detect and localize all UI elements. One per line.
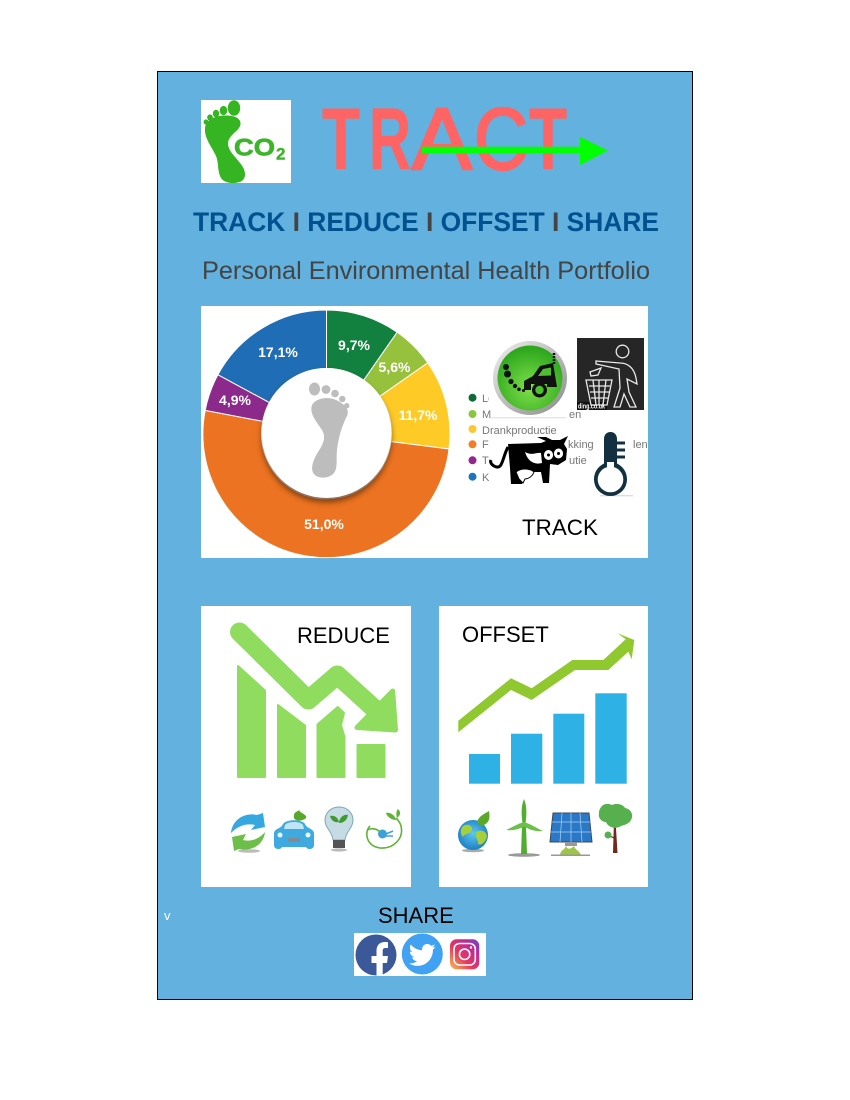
icon: littering sign: ding.co.uk [578,404,605,410]
donut labels: 51,0% [304,516,344,532]
legend: F [482,439,489,451]
icon: car exhaust badge [493,341,567,415]
legend: utie [569,455,587,467]
icon: wind turbine [506,799,543,857]
donut labels: 4,9% [219,392,252,408]
stray letter v: v [164,908,171,923]
legend: K [482,472,490,484]
icon: green plug [367,809,402,848]
icon: green car [274,810,314,849]
label: reduce: REDUCE [297,623,390,648]
legend [468,392,648,496]
donut labels: 11,7% [399,407,438,423]
legend: len [633,439,648,451]
donut chart [203,310,450,558]
legend: M [482,409,491,421]
panel: reduce [201,606,411,887]
chart: rising arrow [458,633,634,732]
icon: twitter [402,934,443,974]
icon: globe [458,811,489,852]
donut labels: 17,1% [258,344,298,360]
title: TRACT: T [529,91,567,188]
arrow: green title arrow [422,137,608,165]
legend: Lo [482,393,494,405]
icon: recycle arrows [231,813,265,853]
legend: en [569,409,581,421]
label: share: SHARE [378,903,454,928]
panel: track [201,306,648,558]
icon: CO2 footprint logo: 2 [276,144,285,164]
icon: thermometer [594,432,627,496]
panel: offset [439,606,648,887]
donut labels [219,337,438,532]
donut labels: 5,6% [379,359,411,375]
donut labels: 9,7% [338,337,371,353]
title: TRACT: T [322,91,360,188]
icon: solar panel [550,813,592,856]
legend: kking [568,439,594,451]
legend: T [482,455,489,467]
poster background panel [158,72,692,1000]
icon: instagram [450,939,479,969]
icon: CO2 footprint logo [201,100,291,183]
icon: tree [599,804,632,853]
donut centre with footprint [262,368,392,502]
legend: Drankproductie [482,425,557,437]
label: track: TRACK [522,515,598,540]
icon: CO2 footprint logo: CO [234,134,275,162]
label: offset: OFFSET [462,622,549,647]
icon: cow [491,436,568,484]
chart: falling bars and arrow [238,632,396,777]
title: TRACT: R [369,91,411,188]
icon: littering sign [577,338,644,410]
title: TRACT: A [412,91,472,188]
title: TRACT: C [474,91,528,188]
heading: track reduce offset share: TRACK I REDUCE I OFFSET I SHARE [193,207,659,237]
icon: facebook [356,934,396,976]
icon: eco light bulb [325,807,353,852]
chart: rising bars [469,693,627,784]
subtitle: Personal Environmental Health Portfolio [202,257,650,285]
panel: social icons [354,933,486,976]
